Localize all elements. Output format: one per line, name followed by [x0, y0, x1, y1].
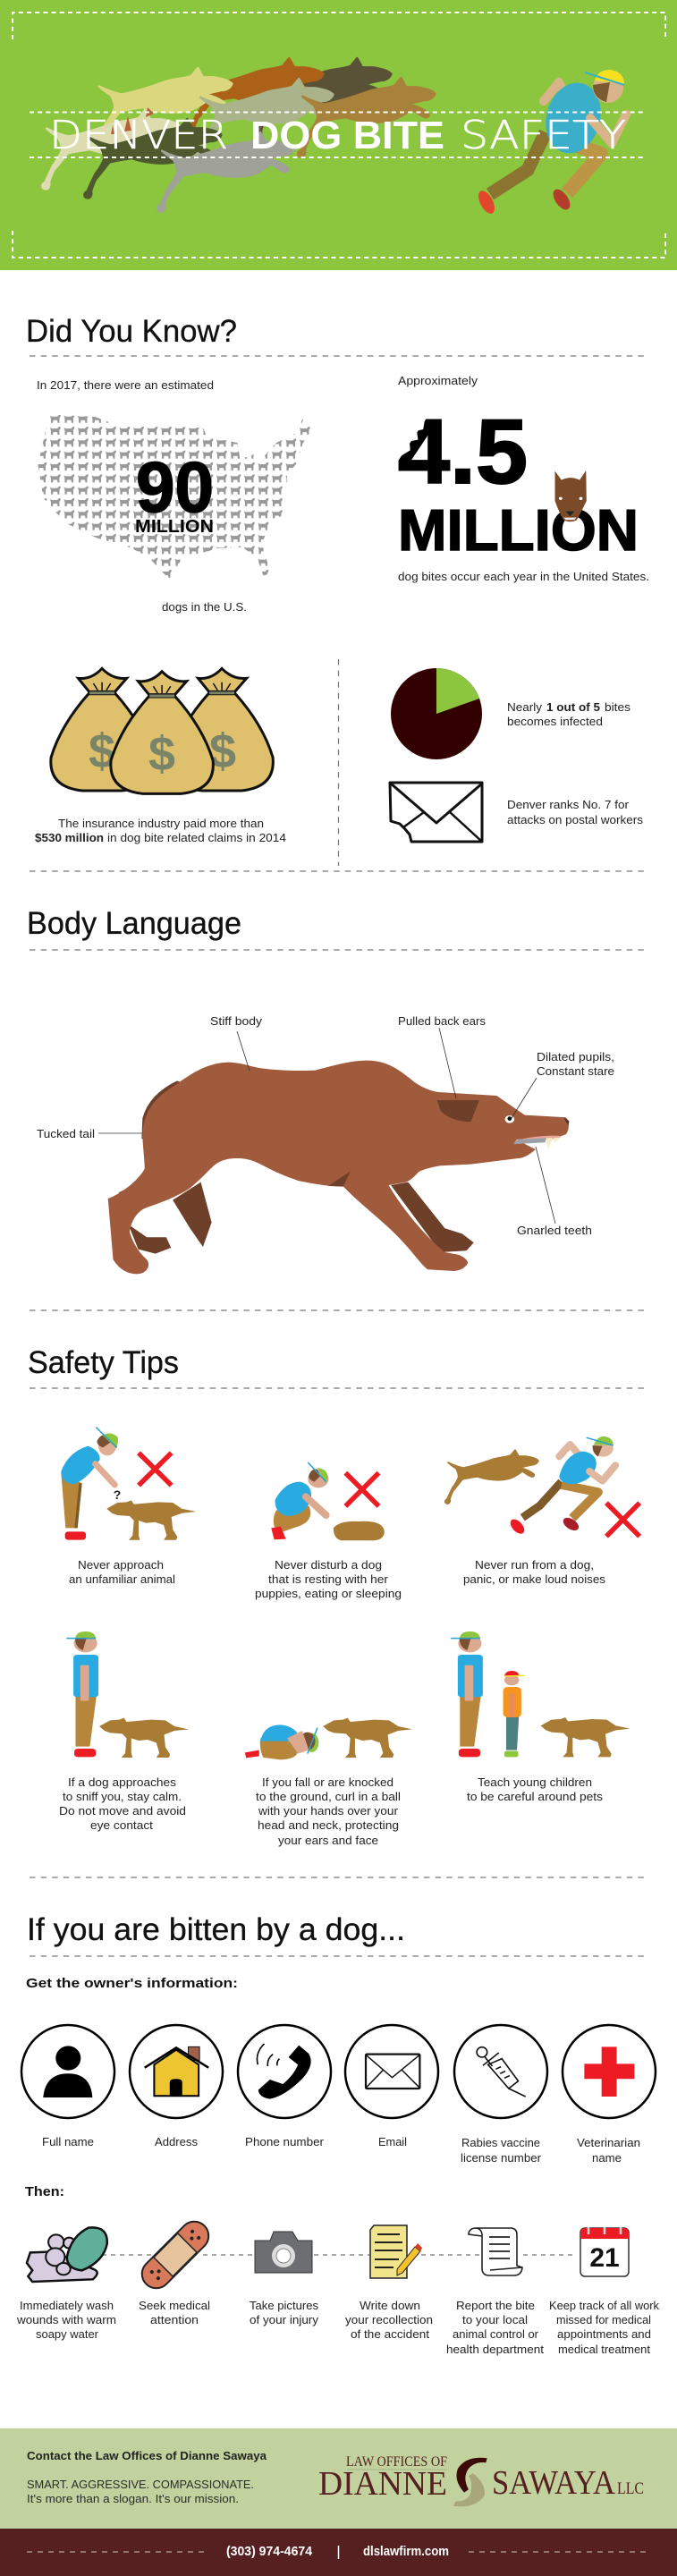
text: insurance caption: [35, 817, 286, 844]
label: dilated pupils: Dilated pupils,: [537, 1050, 614, 1063]
step: take pictures: Take pictures: [250, 2299, 318, 2312]
step: report the bite: health department: [446, 2343, 544, 2356]
caption: [467, 1775, 604, 1803]
slogan: [27, 2478, 254, 2505]
illustration: pack of running dogs: [42, 58, 435, 211]
panel: infected bites: [391, 668, 631, 759]
text: 1 out of 5: [507, 700, 631, 728]
text: approximately: Approximately: [398, 374, 478, 387]
footer contact panel: [0, 2428, 677, 2529]
label: stiff body: Stiff body: [210, 1014, 263, 1028]
text: insurance caption: $530 million: [35, 831, 104, 844]
item: rabies license: [454, 2025, 547, 2165]
heading: Did You Know?: Did You Know?: [26, 314, 237, 349]
text: bites each year: dog bites occur each year in the United States.: [398, 570, 649, 583]
tip: stay calm: [59, 1631, 189, 1832]
caption: [463, 1558, 605, 1586]
illustration: crouching man and sleeping dog: [271, 1462, 385, 1540]
header banner: [0, 0, 677, 270]
step: write down: of the accident: [351, 2327, 429, 2341]
label: gnarled teeth: [517, 1147, 592, 1237]
text: dogs in the U.S.: dogs in the U.S.: [162, 600, 247, 614]
icon: bitten envelope: [390, 783, 482, 842]
text: 1 out of 5: 1 out of 5: [546, 700, 600, 714]
panel: body language diagram: [37, 1014, 614, 1274]
illustration: man leaning at dog: [61, 1428, 172, 1540]
title: DENVER: [49, 113, 228, 158]
caption: [59, 1775, 186, 1832]
slogan: SMART. AGGRESSIVE. COMPASSIONATE.: [27, 2478, 254, 2491]
step: wash wounds: [16, 2227, 116, 2341]
heading: Safety Tips: Safety Tips: [28, 1345, 179, 1380]
caption: [69, 1558, 175, 1586]
step: wash wounds: wounds with warm: [16, 2313, 116, 2326]
label: dilated pupils: Constant stare: [537, 1064, 614, 1078]
phone number: (303) 974-4674: [226, 2544, 313, 2559]
panel: owner info icons: [21, 2025, 656, 2165]
caption: puppies, eating or sleeping: [255, 1587, 402, 1600]
step: keep track: Keep track of all work: [549, 2299, 659, 2312]
illustration: fleeing man: [475, 70, 626, 216]
contact heading: Contact the Law Offices of Dianne Sawaya: [27, 2449, 267, 2462]
item: phone number: Phone number: [245, 2135, 325, 2148]
step: keep track: appointments and: [557, 2327, 651, 2341]
logo: law offices of Dianne Sawaya: SAWAYA: [492, 2464, 615, 2502]
subheading: owner's information: Get the owner's information:: [26, 1976, 238, 1991]
heading: Body Language: Body Language: [27, 906, 241, 941]
label: stiff body: [210, 1014, 263, 1071]
step: take pictures: of your injury: [250, 2313, 319, 2326]
text: Denver ranks: Denver ranks No. 7 for: [507, 798, 630, 811]
caption: Never run from a dog,: [475, 1558, 594, 1572]
step: seek medical attention: [136, 2216, 215, 2326]
step: keep track: [549, 2227, 659, 2356]
text: insurance caption: The insurance industry paid more than: [58, 817, 264, 830]
step: report the bite: [446, 2228, 544, 2356]
item: rabies license: Rabies vaccine: [461, 2136, 540, 2149]
item: email: [345, 2025, 438, 2148]
big number 90: 90: [136, 447, 214, 527]
step: wash wounds: Immediately wash: [20, 2299, 114, 2312]
step: take pictures: [250, 2232, 319, 2326]
title: [49, 113, 626, 158]
icon: dog head: [555, 470, 587, 521]
label: tucked tail: Tucked tail: [37, 1127, 95, 1140]
step: wash wounds: soapy water: [36, 2327, 99, 2341]
step: seek medical attention: attention: [150, 2313, 199, 2326]
item: veterinarian: Veterinarian: [577, 2136, 640, 2149]
panel: postal workers: [390, 783, 644, 842]
big number 4.5: 4.5: [398, 401, 528, 503]
illustration: standing man and sniffing dog: [66, 1631, 189, 1758]
item: address: Address: [155, 2135, 198, 2148]
caption: If a dog approaches: [68, 1775, 177, 1789]
caption: Do not move and avoid: [59, 1804, 186, 1818]
logo: law offices of Dianne Sawaya: [318, 2454, 644, 2506]
text: 1 out of 5: bites: [605, 700, 631, 714]
illustration: adult, child and dog: [451, 1631, 630, 1757]
caption: your ears and face: [278, 1834, 378, 1847]
tip: never approach: [61, 1428, 196, 1586]
caption: an unfamiliar animal: [69, 1572, 175, 1586]
text: 1 out of 5: becomes infected: [507, 715, 603, 728]
icon: money bags: $: [148, 727, 175, 781]
step: keep track: medical treatment: [558, 2343, 650, 2356]
label: dilated pupils: [512, 1050, 614, 1118]
step: keep track: missed for medical: [556, 2313, 651, 2326]
caption: to be careful around pets: [467, 1790, 604, 1803]
text: Denver ranks: attacks on postal workers: [507, 813, 644, 826]
footer contact bar: [0, 2529, 677, 2576]
step: write down: your recollection: [345, 2313, 433, 2326]
tip: never run: [445, 1436, 639, 1586]
caption: to sniff you, stay calm.: [63, 1790, 182, 1803]
step: seek medical attention: Seek medical: [139, 2299, 210, 2312]
step: report the bite: Report the bite: [456, 2299, 535, 2312]
logo: law offices of Dianne Sawaya: LLC: [617, 2479, 644, 2498]
item: full name: [21, 2025, 114, 2148]
text: 1 out of 5: Nearly: [507, 700, 543, 714]
step: write down: [345, 2225, 433, 2341]
label: pulled back ears: Pulled back ears: [398, 1014, 486, 1028]
step: report the bite: animal control or: [453, 2327, 539, 2341]
item: email: Email: [378, 2135, 407, 2148]
item: full name: Full name: [42, 2135, 94, 2148]
caption: that is resting with her: [268, 1572, 389, 1586]
caption: panic, or make loud noises: [463, 1572, 605, 1586]
label: million: MILLION: [135, 517, 214, 537]
panel: 90 million dogs: [38, 381, 310, 614]
map of US made of dogs: [38, 415, 310, 578]
caption: [256, 1775, 401, 1847]
caption: Teach young children: [478, 1775, 592, 1789]
illustration: curled up man and dog: [245, 1718, 412, 1759]
text: insurance caption: in dog bite related claims in 2014: [107, 831, 286, 844]
panel: insurance claims: [35, 668, 286, 844]
label: gnarled teeth: Gnarled teeth: [517, 1224, 592, 1237]
item: veterinarian: name: [592, 2151, 622, 2165]
caption: with your hands over your: [258, 1804, 399, 1818]
panel: 4.5 million bites: [395, 374, 649, 583]
icon: money bags: [51, 668, 273, 793]
step: report the bite: to your local: [462, 2313, 528, 2326]
caption: [255, 1558, 402, 1600]
tip: never disturb: [255, 1462, 402, 1600]
item: rabies license: license number: [461, 2151, 542, 2165]
text: estimated intro: In 2017, there were an estimated: [37, 378, 214, 392]
website: dlslawfirm.com: [363, 2544, 449, 2559]
caption: Never disturb a dog: [275, 1558, 382, 1572]
caption: head and neck, protecting: [258, 1818, 399, 1832]
illustration: aggressive dog: [108, 1061, 569, 1274]
tip: teach children: [451, 1631, 630, 1803]
caption: If you fall or are knocked: [262, 1775, 394, 1789]
title: DOG BITE: [250, 114, 444, 157]
question mark: ?: [114, 1487, 121, 1502]
label: pulled back ears: [398, 1014, 486, 1098]
slogan: It's more than a slogan. It's our mission.: [27, 2492, 239, 2505]
logo: law offices of Dianne Sawaya: DIANNE: [318, 2465, 447, 2503]
caption: to the ground, curl in a ball: [256, 1790, 401, 1803]
heading: If you are bitten: If you are bitten by a dog...: [27, 1912, 405, 1947]
panel: next steps: [16, 2216, 659, 2356]
title: SAFETY: [461, 113, 626, 158]
item: veterinarian: [563, 2025, 656, 2165]
caption: Never approach: [78, 1558, 164, 1572]
label: tucked tail: [37, 1127, 142, 1140]
item: address: [130, 2025, 223, 2148]
logo: law offices of Dianne Sawaya: LAW OFFICES OF: [346, 2454, 447, 2470]
step: keep track: 21: [589, 2243, 620, 2273]
caption: eye contact: [90, 1818, 153, 1832]
icon: money bags: $: [89, 724, 115, 778]
illustration: dog chasing running man: [445, 1436, 639, 1537]
big word MILLION: MILLION: [398, 497, 639, 563]
subheading: then: Then:: [25, 2184, 64, 2199]
text: Denver ranks: [507, 798, 644, 826]
item: phone number: [238, 2025, 331, 2148]
tip: curl in a ball: [245, 1718, 412, 1847]
pie chart: [391, 668, 482, 759]
step: write down: Write down: [360, 2299, 420, 2312]
illustration: dog: [106, 1500, 196, 1540]
bite marks on the 4: [395, 416, 426, 458]
icon: money bags: $: [209, 724, 236, 778]
